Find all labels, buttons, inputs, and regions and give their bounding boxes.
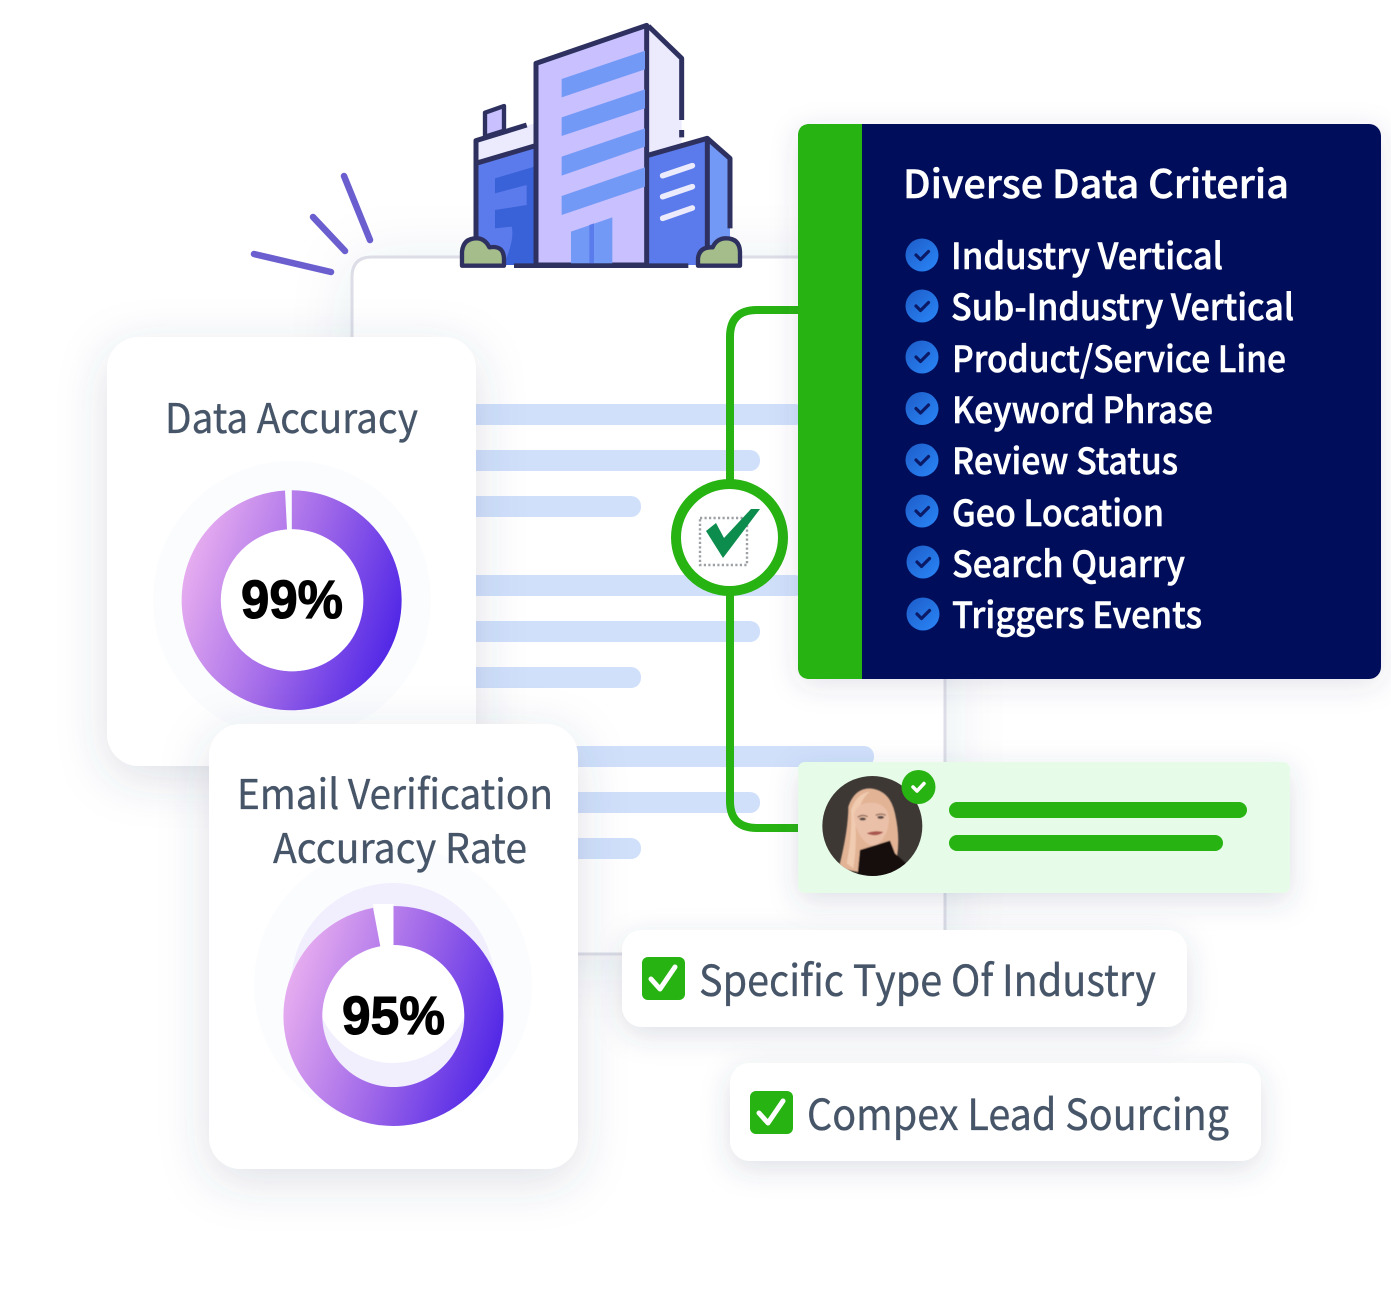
criteria list: [906, 228, 1294, 639]
tag: specific type of industry: Specific Type Of Industry: [699, 947, 1156, 1009]
donut chart 95%: [254, 846, 532, 1126]
avatar: [822, 776, 922, 876]
card heading: Email Verification: [237, 761, 553, 821]
icon: burst rays: [254, 176, 370, 272]
donut chart 99%: [153, 461, 431, 739]
criteria list: Geo Location: [952, 485, 1164, 537]
criteria list: Search Quarry: [952, 536, 1185, 588]
criteria list: Industry Vertical: [951, 228, 1223, 280]
tag: complex lead sourcing: Compex Lead Sourcing: [807, 1081, 1229, 1143]
criteria list: Triggers Events: [952, 587, 1202, 639]
icon: verification badge: [676, 484, 783, 591]
panel: diverse data criteria: [798, 124, 1381, 679]
criteria list: Keyword Phrase: [952, 382, 1213, 434]
criteria list: Product/Service Line: [952, 331, 1286, 383]
green connector line: [730, 310, 800, 828]
background panel with connector lines: [352, 257, 945, 954]
card: data accuracy: [107, 337, 476, 766]
donut chart 99%: 99%: [241, 570, 343, 630]
person card: [798, 762, 1290, 893]
card heading: Accuracy Rate: [273, 815, 527, 875]
icon: office building: [462, 25, 740, 266]
card heading: Data Accuracy: [165, 385, 418, 445]
donut chart 95%: 95%: [342, 986, 445, 1046]
tag: complex lead sourcing: [730, 1063, 1261, 1161]
tag: specific type of industry: [622, 930, 1187, 1027]
card: email verification accuracy rate: [209, 724, 578, 1169]
criteria list: Review Status: [952, 433, 1178, 485]
skeleton text bars: [460, 404, 874, 859]
panel heading: Diverse Data Criteria: [903, 154, 1289, 210]
name placeholder lines: [949, 802, 1247, 851]
avatar check badge: [902, 770, 936, 804]
card heading: [237, 761, 553, 875]
criteria list: Sub-Industry Vertical: [951, 279, 1294, 331]
